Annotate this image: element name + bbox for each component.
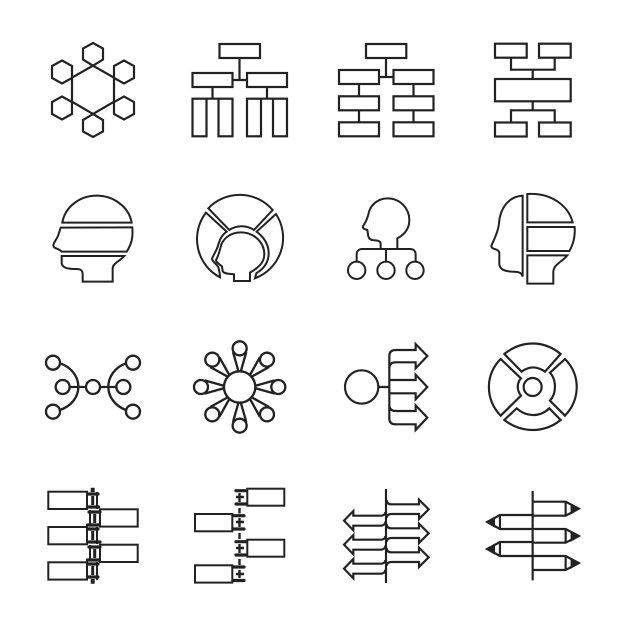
icon: head with hierarchy of circles bbox=[348, 198, 424, 279]
icon: axis with alternating pencils bbox=[487, 491, 579, 580]
icon: hexagon network bbox=[52, 43, 134, 137]
icon: head split into bands bbox=[53, 196, 133, 282]
icon: head split into front and three sections bbox=[491, 194, 575, 284]
icon: org chart with tall columns bbox=[192, 44, 287, 136]
icon: head inside segmented circle bbox=[197, 195, 283, 281]
icon: segmented target ring bbox=[489, 343, 577, 430]
icon: central block chart bbox=[495, 44, 571, 137]
icon: org chart with stacked boxes bbox=[339, 44, 434, 136]
icon: radial hub with teardrop petals bbox=[194, 341, 285, 433]
icon: axis with alternating double arrows bbox=[344, 489, 429, 583]
icon: broken chain with alternating boxes bbox=[195, 489, 284, 583]
icon: mirrored branching nodes bbox=[46, 356, 140, 419]
icon: circle with three forking arrows bbox=[345, 344, 427, 430]
icon: chain timeline with alternating boxes bbox=[48, 488, 138, 584]
